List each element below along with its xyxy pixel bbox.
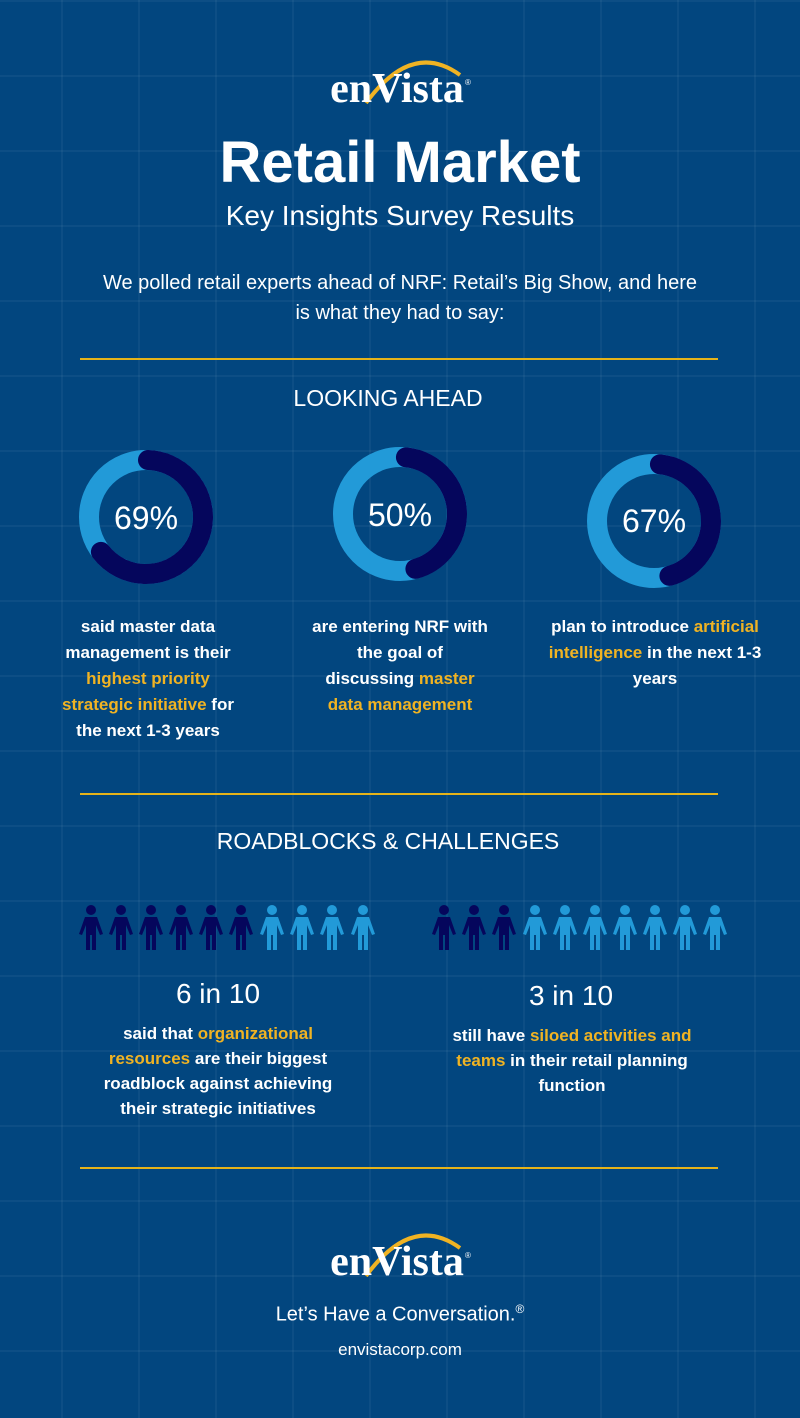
donut 69%: 69%: [114, 500, 178, 536]
donut charts: [79, 447, 721, 588]
logo bottom: ®: [465, 1251, 471, 1260]
group 1: [79, 905, 253, 950]
title: Retail Market: [219, 130, 581, 195]
stat text 3: plan to introduce artificial intelligence in the next 1-3 years: [549, 617, 761, 688]
heading: looking ahead: LOOKING AHEAD: [293, 385, 483, 411]
website: envistacorp.com: [338, 1340, 462, 1359]
heading: roadblocks: ROADBLOCKS & CHALLENGES: [217, 828, 559, 854]
stat text 5: still have siloed activities and teams in their retail planning function: [452, 1026, 692, 1095]
stat text 2: are entering NRF with the goal of discussing master data management: [312, 617, 488, 714]
people icons: [79, 905, 727, 950]
donut 69%: [87, 458, 205, 576]
donut 50%: [337, 451, 463, 577]
stat 6 in 10: 6 in 10: [176, 978, 260, 1009]
donut 67%: [591, 458, 717, 584]
stat 3 in 10: 3 in 10: [529, 980, 613, 1011]
logo top: ®: [465, 78, 471, 87]
tagline: Let’s Have a Conversation.®: [276, 1302, 524, 1326]
stat text 4: said that organizational resources are their biggest roadblock against achieving their strategic initiatives: [104, 1024, 332, 1118]
stat text 1: said master data management is their highest priority strategic initiative for the next 1-3 years: [62, 617, 234, 740]
group 2: [432, 905, 516, 950]
intro text: We polled retail experts ahead of NRF: Retail’s Big Show, and here is what they had to say:: [103, 272, 697, 324]
donut 50%: 50%: [368, 497, 432, 533]
donut 67%: 67%: [622, 503, 686, 539]
subtitle: Key Insights Survey Results: [226, 200, 574, 231]
